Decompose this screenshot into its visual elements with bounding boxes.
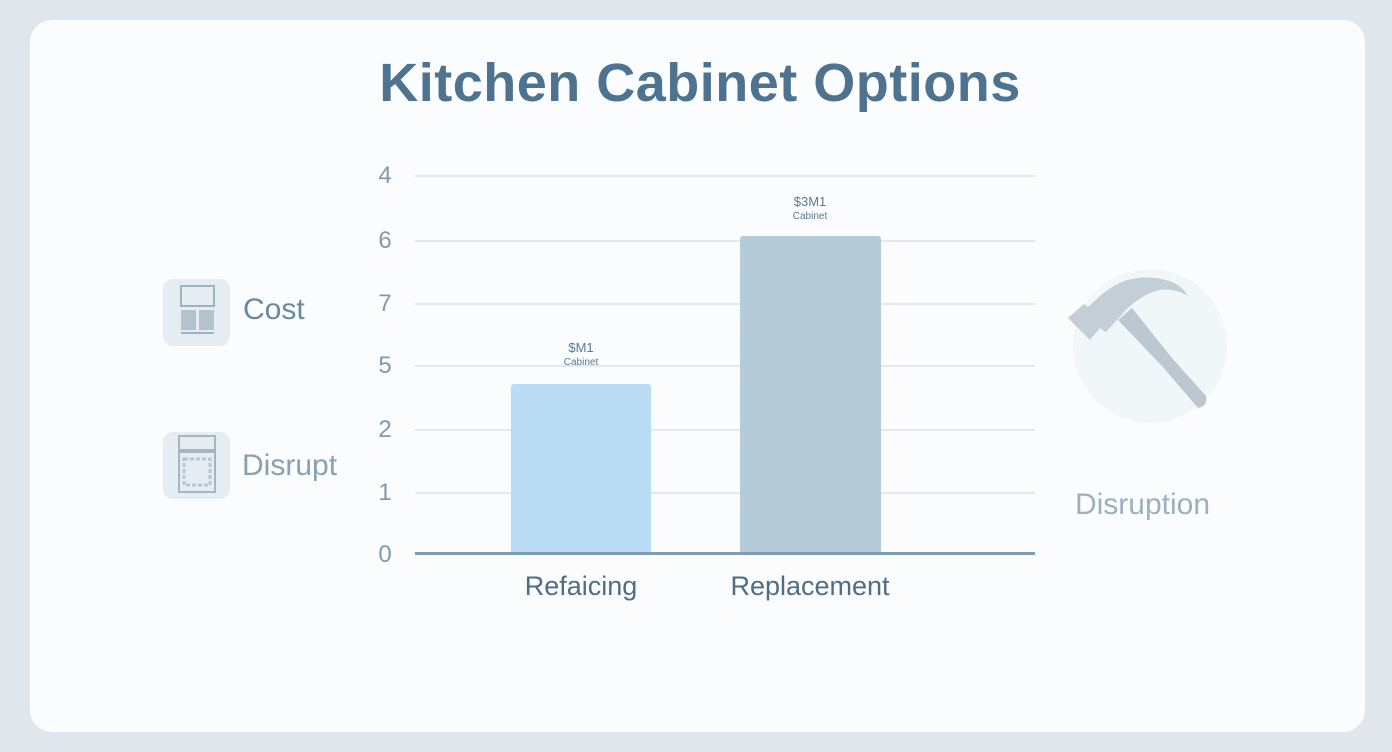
icon: calculator — [163, 432, 230, 499]
icon: cabinet — [163, 279, 230, 346]
y labels: 1 — [378, 479, 392, 506]
bar label refacing: $M1 — [568, 340, 594, 355]
title: Kitchen Cabinet Options — [379, 53, 1021, 113]
label: disruption: Disruption — [1075, 488, 1210, 521]
y labels: 7 — [378, 290, 392, 317]
bar chart — [378, 162, 1035, 601]
x label replacement: Replacement — [730, 571, 890, 601]
axis — [415, 552, 1035, 555]
y labels: 4 — [378, 162, 392, 189]
bar label refacing: Cabinet — [564, 357, 598, 368]
bar label replacement: Cabinet — [793, 211, 827, 222]
y labels: 5 — [378, 352, 392, 379]
y labels — [378, 162, 392, 568]
icon: hammer — [1068, 269, 1227, 423]
legend: disrupt — [163, 432, 337, 499]
y labels: 6 — [378, 227, 392, 254]
bar label replacement: $3M1 — [794, 194, 826, 209]
bar label refacing — [564, 340, 598, 368]
y labels: 0 — [378, 541, 392, 568]
bar: replacement — [740, 236, 881, 552]
legend: cost: Cost — [243, 293, 305, 326]
legend: cost — [163, 279, 305, 346]
x label refacing: Refaicing — [525, 571, 637, 601]
legend: disrupt: Disrupt — [242, 449, 337, 482]
bar label replacement — [793, 194, 828, 222]
y labels: 2 — [378, 416, 392, 443]
bar: refacing — [511, 384, 651, 552]
